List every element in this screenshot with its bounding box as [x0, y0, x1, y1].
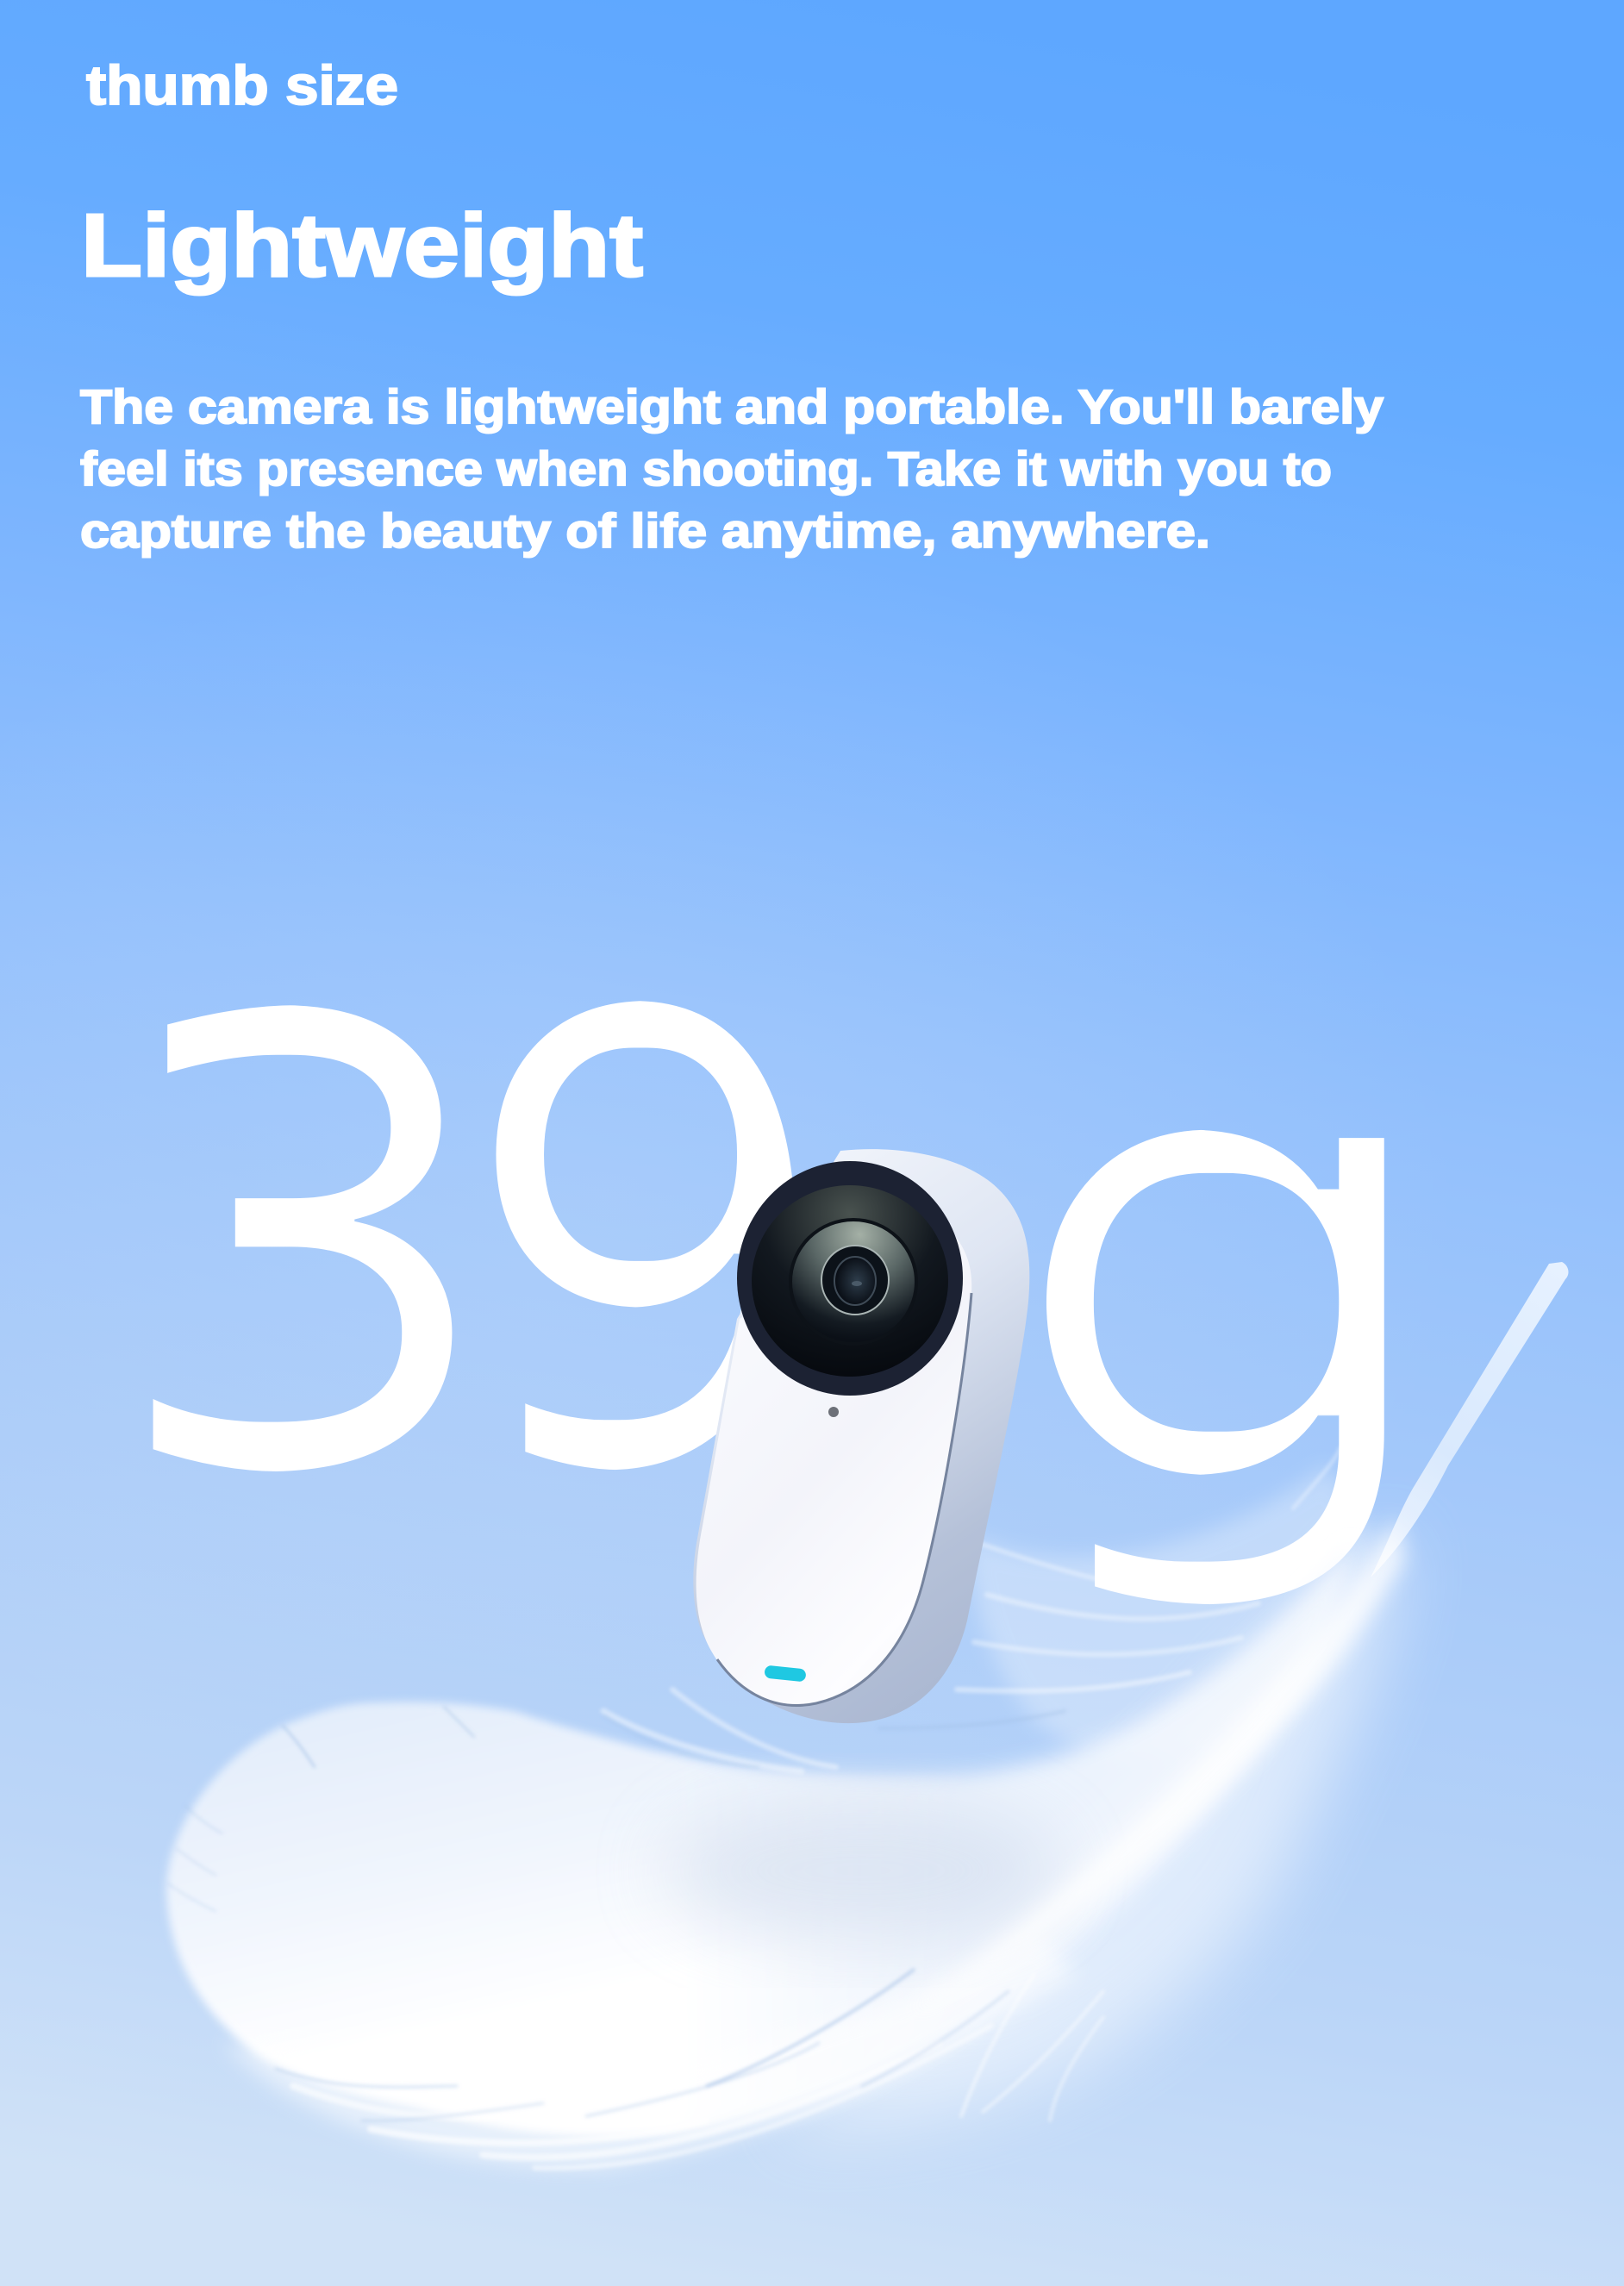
tagline: thumb size: thumb size	[86, 54, 398, 116]
description paragraph: feel its presence when shooting. Take it with you to	[80, 441, 1332, 496]
description paragraph: The camera is lightweight and portable. You'll barely	[80, 379, 1384, 434]
feather vane body	[162, 1698, 831, 2137]
large weight figure: 39g: 3	[97, 890, 511, 1610]
feather soft barb strands	[293, 1448, 1340, 2168]
white feather	[166, 1262, 1568, 2168]
large weight figure: 39g: 9	[450, 885, 846, 1609]
feather soft barbs upper right	[965, 1465, 1379, 1758]
large weight figure: 39g: g	[996, 900, 1461, 1624]
camera lens	[737, 1161, 963, 1396]
feather blue crease lines	[168, 1707, 1065, 2120]
camera rear shell	[693, 1149, 1029, 1723]
camera cyan LED	[764, 1665, 807, 1682]
feather quill	[1371, 1262, 1568, 1577]
feather right haze	[776, 1526, 1400, 2129]
feather central shadow	[664, 1797, 1060, 1944]
large weight figure: 39g	[97, 885, 1461, 1624]
feather soft lower strands glow	[224, 1931, 1077, 2168]
camera front face	[696, 1207, 971, 1705]
feather bright rachis glow	[905, 1517, 1405, 2017]
description paragraph	[80, 379, 1384, 558]
camera	[693, 1149, 1029, 1723]
title: Lightweight: Lightweight	[81, 196, 643, 295]
description paragraph: capture the beauty of life anytime, anywhere.	[80, 503, 1210, 558]
camera seam line	[717, 1293, 971, 1705]
feather translucent right vane	[655, 1543, 1353, 2129]
camera status dot	[828, 1407, 839, 1417]
